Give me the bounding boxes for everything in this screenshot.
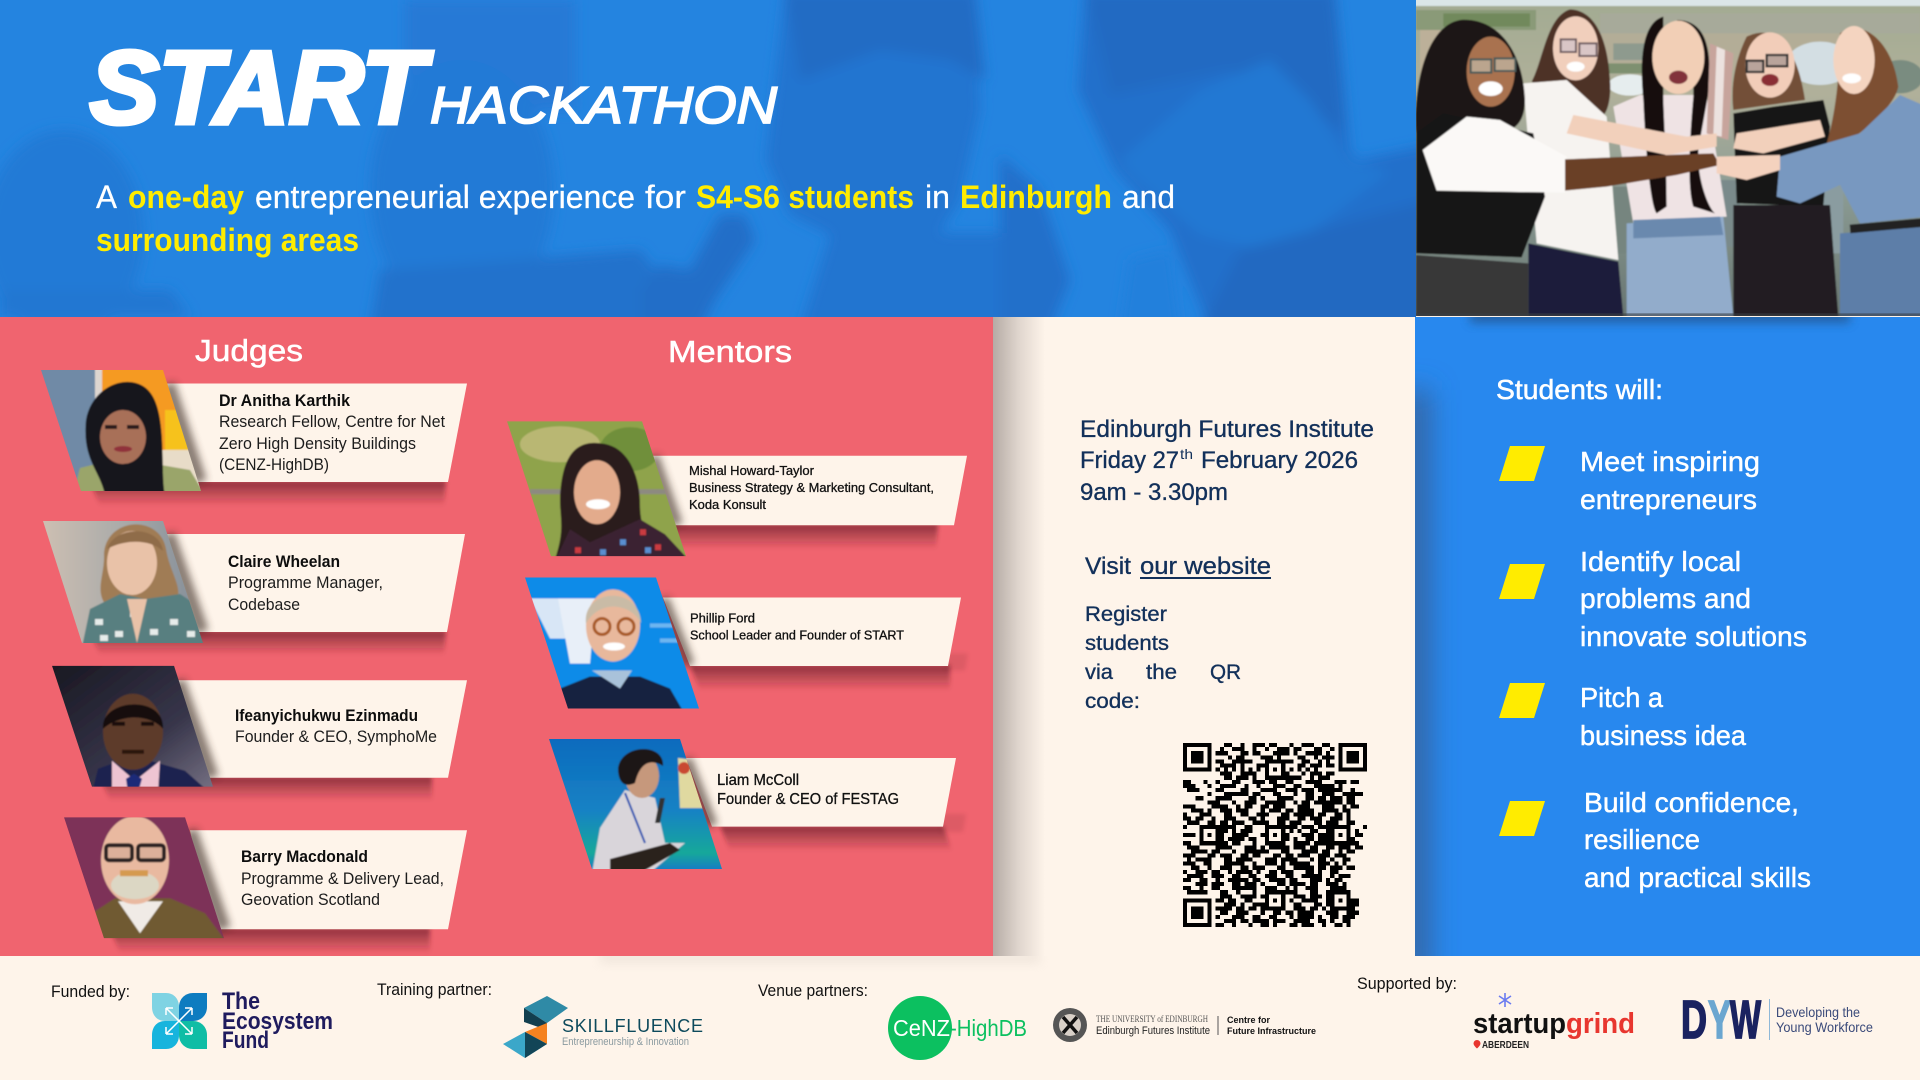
funded by label: Funded by:: [51, 982, 130, 1001]
name and role: Liam McColl: Liam McColl: [717, 772, 799, 789]
tagline: in: [925, 179, 950, 215]
portrait: Claire Wheelan: [43, 521, 203, 643]
event location and date: Edinburgh Futures Institute: [1080, 416, 1374, 443]
header banner: [0, 0, 1430, 340]
footer: partners strip: [51, 974, 1873, 1060]
name and role: Anitha Karthik: [219, 392, 445, 474]
mentor card: Phillip Ford: [520, 572, 968, 714]
name and role: Barry Macdonald: Programme & Delivery Lead,: [241, 870, 444, 888]
register text: code:: [1085, 690, 1140, 713]
bullet: pitch: [1499, 682, 1746, 751]
training partner label: Training partner:: [377, 980, 492, 999]
bullet: build confidence: resilience: [1584, 824, 1700, 855]
bullet: build confidence: [1499, 787, 1811, 893]
logo: The Ecosystem Fund: Ecosystem: [222, 1008, 333, 1035]
name and role: Liam McColl: [717, 772, 899, 808]
tagline: A: [96, 179, 118, 215]
name and role: Anitha Karthik: Dr Anitha Karthik: [219, 392, 351, 410]
portrait: Mishal Howard-Taylor: [507, 421, 686, 556]
QR finder and alignment patterns: [1183, 743, 1367, 927]
website link: our website: [1140, 553, 1271, 580]
judge card: Anitha Karthik: [35, 365, 467, 506]
logo: The Ecosystem Fund: Fund: [222, 1027, 269, 1054]
name and role: Anitha Karthik: Zero High Density Buildings: [219, 435, 416, 453]
bullet: identify problems: innovate solutions: [1580, 621, 1807, 652]
name and role: Claire Wheelan: Codebase: [228, 596, 300, 614]
name and role: Barry Macdonald: [241, 848, 444, 909]
portrait: Barry Macdonald: [64, 817, 224, 938]
heading: mentors: Mentors: [668, 334, 792, 369]
logo: CeNZ-HighDB: CeNZ: [893, 1015, 950, 1041]
logo: Skillfluence: Entrepreneurship & Innovation: [562, 1036, 689, 1048]
logo: University of Edinburgh: [1053, 1008, 1316, 1042]
name and role: Barry Macdonald: Barry Macdonald: [241, 848, 368, 866]
name and role: Phillip Ford: School Leader and Founder of START: [690, 628, 904, 642]
supported by label: Supported by:: [1357, 974, 1457, 993]
register text: the: [1146, 661, 1177, 684]
portrait: Liam McColl: [549, 739, 722, 869]
bullet: pitch: business idea: [1580, 720, 1746, 751]
logo: The Ecosystem Fund: The: [222, 988, 260, 1015]
logo: Startup Grind Aberdeen: ABERDEEN: [1482, 1040, 1529, 1051]
tagline: for: [645, 179, 686, 215]
bullet: meet entrepreneurs: [1499, 446, 1760, 515]
tagline: one-day: [128, 179, 244, 215]
bullet: build confidence: and practical skills: [1584, 862, 1811, 893]
heading: students will: Students will:: [1496, 374, 1663, 405]
portrait: Ifeanyichukwu Ezinmadu: [52, 666, 213, 787]
logo: Developing the Young Workforce: Young Workforce: [1776, 1019, 1873, 1035]
portrait: Phillip Ford: [525, 578, 699, 708]
logo: Skillfluence: [503, 996, 703, 1058]
name and role: Anitha Karthik: Research Fellow, Centre for Net: [219, 413, 445, 431]
register text: students: [1085, 632, 1169, 655]
register text: QR: [1210, 661, 1241, 684]
name and role: Mishal Howard-Taylor: Mishal Howard-Taylor: [689, 463, 815, 478]
tagline: and: [1122, 179, 1175, 215]
logo: University of Edinburgh: THE UNIVERSITY of EDINBURGH: [1096, 1014, 1208, 1024]
heading: judges: Judges: [195, 333, 303, 368]
register text: [1085, 603, 1241, 713]
bullet: pitch: Pitch a: [1580, 682, 1663, 713]
bullet: identify problems: [1499, 546, 1807, 652]
name and role: Ifeanyichukwu Ezinmadu: [235, 707, 437, 746]
name and role: Phillip Ford: [690, 610, 904, 642]
red panel: judges and mentors: [0, 317, 993, 956]
logo: Developing the Young Workforce: W: [1730, 990, 1761, 1050]
bullet: meet entrepreneurs: entrepreneurs: [1580, 484, 1757, 515]
name and role: Claire Wheelan: [228, 553, 383, 614]
name and role: Anitha Karthik: (CENZ-HighDB): [219, 456, 329, 474]
blue panel: students will: [1403, 307, 1920, 980]
logo: Startup Grind Aberdeen: [1473, 993, 1635, 1051]
name and role: Ifeanyichukwu Ezinmadu: Ifeanyichukwu Ezinmadu: [235, 707, 418, 725]
register text: via: [1085, 661, 1113, 684]
tagline: Edinburgh: [960, 179, 1112, 215]
bullet: meet entrepreneurs: Meet inspiring: [1580, 446, 1760, 477]
event location and date: [1080, 416, 1374, 506]
logo: CeNZ-HighDB: -HighDB: [950, 1015, 1027, 1041]
logo: Startup Grind Aberdeen: grind: [1566, 1008, 1635, 1040]
name and role: Barry Macdonald: Geovation Scotland: [241, 891, 380, 909]
header background photo silhouettes: [0, 0, 1430, 340]
judge card: Barry Macdonald: [58, 812, 467, 953]
title: HACKATHON: HACKATHON: [430, 77, 777, 135]
name and role: Claire Wheelan: Programme Manager,: [228, 574, 383, 592]
logo: Startup Grind Aberdeen: startup: [1473, 1008, 1566, 1040]
tagline: S4-S6 students: [696, 179, 914, 215]
website link: Visit: [1085, 553, 1131, 580]
name and role: Mishal Howard-Taylor: Koda Konsult: [689, 497, 766, 512]
tagline: surrounding areas: [96, 222, 359, 258]
judge card: Ifeanyichukwu Ezinmadu: [46, 661, 467, 801]
bullet: identify problems: Identify local: [1580, 546, 1741, 577]
bullet: build confidence: Build confidence,: [1584, 787, 1799, 818]
event location and date: th: [1180, 446, 1193, 462]
QR code: [1183, 743, 1367, 927]
logo: Developing the Young Workforce: [1681, 990, 1873, 1050]
event location and date: February 2026: [1201, 447, 1358, 474]
name and role: Mishal Howard-Taylor: [689, 463, 934, 512]
tagline: entrepreneurial experience: [255, 179, 635, 215]
cream panel: event details: [993, 317, 1415, 956]
event location and date: Friday 27: [1080, 447, 1179, 474]
photo: winning student team: [1410, 0, 1920, 320]
name and role: Liam McColl: Founder & CEO of FESTAG: [717, 791, 899, 808]
logo: CeNZ-HighDB: [888, 996, 1027, 1060]
title: START: START: [90, 30, 433, 145]
name and role: Claire Wheelan: Claire Wheelan: [228, 553, 340, 571]
name and role: Phillip Ford: Phillip Ford: [690, 610, 755, 626]
logo: The Ecosystem Fund: [152, 988, 333, 1054]
logo: Developing the Young Workforce: Y: [1708, 990, 1731, 1050]
venue partners label: Venue partners:: [758, 981, 868, 1000]
website link: [1085, 553, 1271, 580]
logo: Developing the Young Workforce: Developing the: [1776, 1004, 1860, 1020]
judge card: Claire Wheelan: [38, 517, 465, 655]
portrait: Anitha Karthik: [41, 370, 201, 491]
bullet: identify problems: problems and: [1580, 583, 1751, 614]
logo: Developing the Young Workforce: D: [1681, 990, 1707, 1050]
name and role: Ifeanyichukwu Ezinmadu: Founder & CEO, SymphoMe: [235, 728, 437, 746]
logo: Skillfluence: SKILLFLUENCE: [562, 1016, 703, 1036]
logo: University of Edinburgh: Future Infrastructure: [1227, 1026, 1316, 1036]
register text: Register: [1085, 603, 1167, 626]
mentor card: Mishal Howard-Taylor: [500, 417, 967, 561]
tagline: [96, 179, 1175, 258]
mentor card: Liam McColl: [544, 734, 966, 874]
name and role: Mishal Howard-Taylor: Business Strategy & Marketing Consultant,: [689, 480, 934, 495]
logo: University of Edinburgh: Edinburgh Futures Institute: [1096, 1025, 1210, 1037]
event location and date: 9am - 3.30pm: [1080, 479, 1228, 506]
logo: University of Edinburgh: Centre for: [1227, 1015, 1270, 1025]
